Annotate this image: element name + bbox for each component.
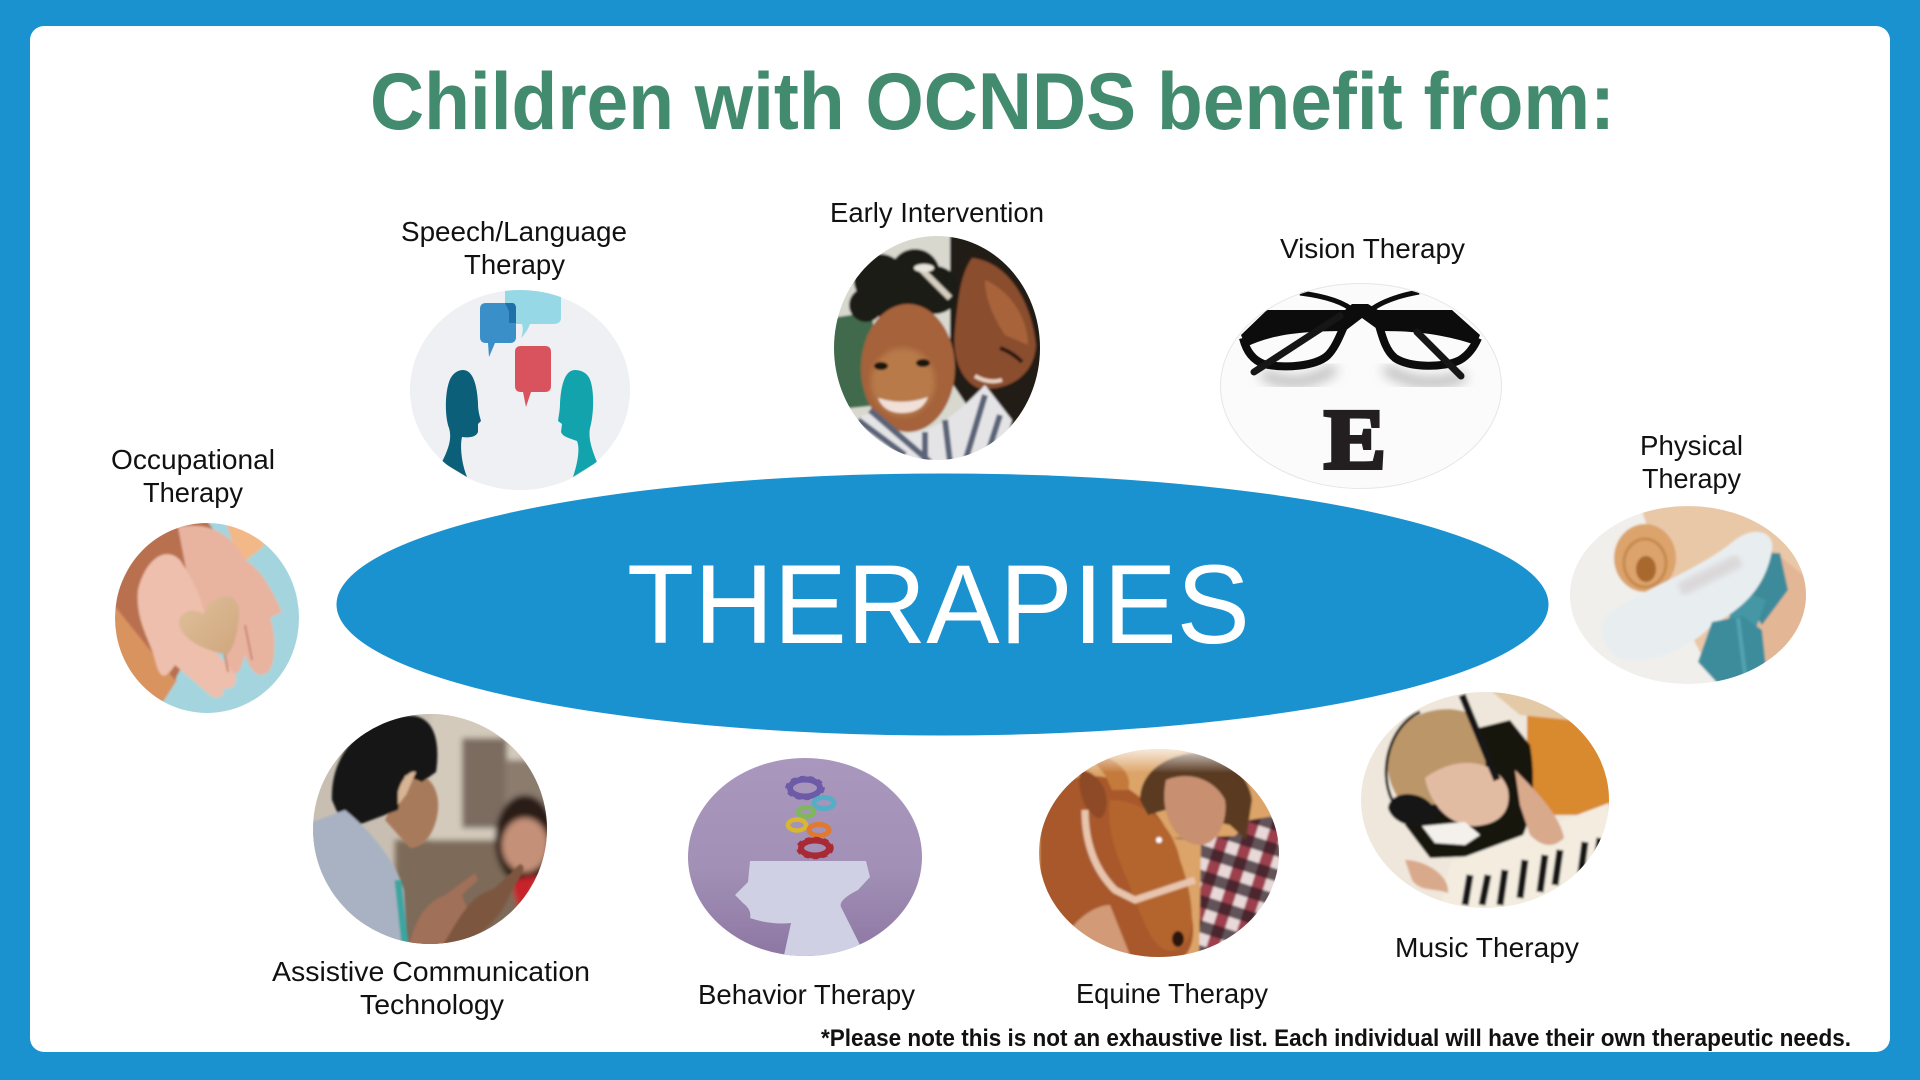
central heading: THERAPIES xyxy=(627,542,1250,667)
headphones xyxy=(1388,794,1438,826)
face xyxy=(1425,763,1509,826)
hands xyxy=(1515,770,1564,845)
therapy: physical xyxy=(1565,430,1810,690)
therapy: vision xyxy=(1215,233,1507,494)
lower hand xyxy=(138,554,236,697)
label: Behavior Therapy xyxy=(698,979,915,1010)
therapy: occupational xyxy=(110,444,305,720)
label: Assistive Communication xyxy=(272,956,590,987)
upper hand xyxy=(178,526,282,675)
photo: girl with horse xyxy=(1035,745,1285,960)
hair xyxy=(1388,709,1486,805)
therapy: equine xyxy=(1035,745,1285,1009)
icon: glasses xyxy=(1241,292,1480,376)
label xyxy=(1640,430,1743,494)
baby hair xyxy=(849,249,959,326)
collar xyxy=(1422,822,1480,845)
therapy: assistive communication technology xyxy=(272,710,590,1020)
signing hands xyxy=(408,873,478,950)
label xyxy=(401,216,627,280)
photo: man signing with woman xyxy=(313,714,547,944)
therapy: music xyxy=(1355,688,1615,963)
icon: eye chart letter: E xyxy=(1324,391,1386,487)
label: Music Therapy xyxy=(1395,932,1579,963)
label: Physical xyxy=(1640,430,1743,461)
label: Therapy xyxy=(1642,463,1741,494)
label: Therapy xyxy=(464,249,565,280)
dress xyxy=(1405,720,1533,858)
therapy: behavior xyxy=(685,755,925,1010)
label: Equine Therapy xyxy=(1076,978,1268,1009)
photo: hands holding wooden heart xyxy=(115,523,299,713)
therapy: early intervention xyxy=(830,197,1045,465)
photo: head with gears xyxy=(685,755,925,960)
photo: glasses and eye chart xyxy=(1239,290,1482,470)
central ellipse: therapies xyxy=(336,474,1548,736)
footnote: *Please note this is not an exhaustive list. Each individual will have their own therapeutic needs. xyxy=(821,1025,1851,1052)
therapy: speech/language xyxy=(401,216,635,495)
label xyxy=(111,444,275,508)
photo: mother and baby xyxy=(830,230,1045,465)
gears xyxy=(787,778,834,858)
shadows under glasses xyxy=(1262,368,1465,382)
faded top edge xyxy=(1085,749,1234,772)
label: Therapy xyxy=(143,477,243,508)
title: Children with OCNDS benefit from: xyxy=(370,57,1615,147)
piano keys xyxy=(1465,802,1609,858)
label: Early Intervention xyxy=(830,197,1044,228)
label: Technology xyxy=(360,989,504,1020)
wooden heart xyxy=(179,596,239,655)
label: Occupational xyxy=(111,444,275,475)
head silhouette xyxy=(735,861,870,960)
photo: mat, bottle, dumbbell xyxy=(1565,500,1810,690)
photo: speaking silhouettes xyxy=(405,285,635,495)
label: Speech/Language xyxy=(401,216,627,247)
label xyxy=(272,956,590,1020)
photo: child with headphones at keyboard xyxy=(1355,688,1615,915)
label: Vision Therapy xyxy=(1280,233,1465,264)
circle outline xyxy=(1220,284,1502,488)
